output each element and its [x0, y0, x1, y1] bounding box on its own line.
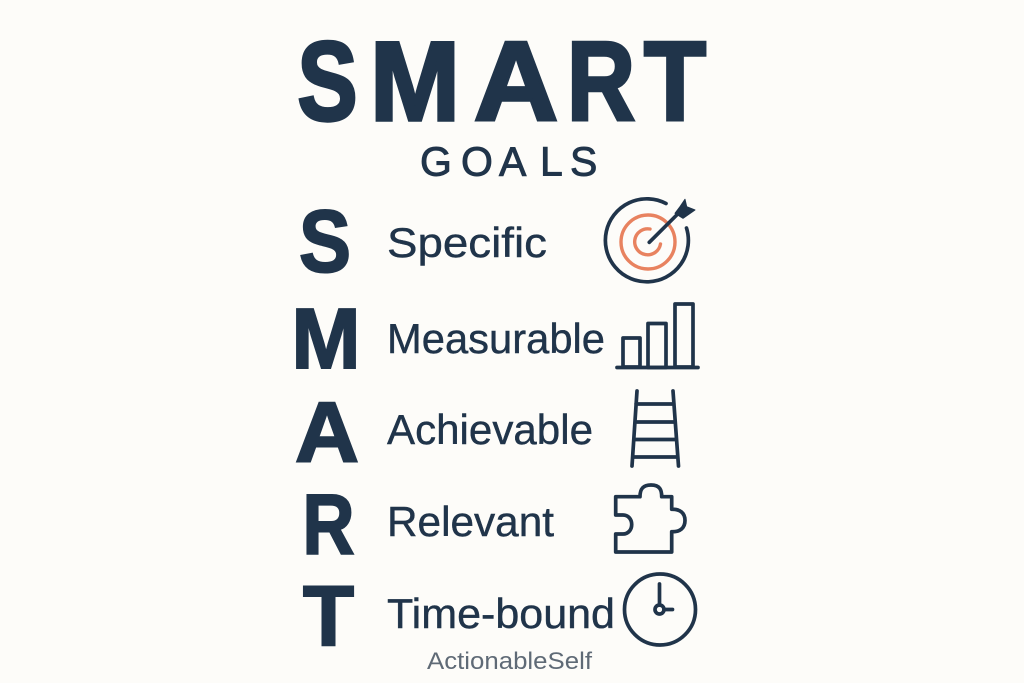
- title: SMART: S: [298, 19, 358, 144]
- title: SMART: A: [474, 19, 558, 144]
- letter T: T: [303, 570, 354, 664]
- letter M: M: [292, 292, 360, 387]
- title: SMART: [298, 19, 706, 144]
- icon: clock: [624, 574, 696, 645]
- letter R: R: [302, 478, 354, 573]
- title: SMART: T: [644, 19, 706, 144]
- label: Relevant: Relevant: [387, 498, 554, 545]
- label: Measurable: Measurable: [387, 315, 605, 362]
- label: Achievable: Achievable: [387, 406, 593, 453]
- title: SMART: R: [567, 19, 635, 144]
- row: Measurable: [292, 292, 698, 387]
- row: Relevant: [302, 478, 685, 573]
- label: Time-bound: Time-bound: [387, 590, 615, 637]
- icon: target with arrow: [605, 199, 695, 282]
- title: SMART: M: [370, 19, 460, 144]
- letter A: A: [295, 386, 359, 480]
- row: Specific: [299, 192, 695, 290]
- label: Specific: Specific: [387, 219, 547, 266]
- row: Achievable: [295, 386, 678, 480]
- footer: ActionableSelf: ActionableSelf: [427, 648, 592, 675]
- row: Time-bound: [303, 570, 696, 664]
- subtitle: GOALS: GOALS: [420, 138, 597, 184]
- icon: bar chart: [617, 304, 698, 368]
- icon: puzzle piece: [616, 485, 685, 552]
- letter S: S: [299, 192, 351, 290]
- icon: ladder: [632, 391, 678, 466]
